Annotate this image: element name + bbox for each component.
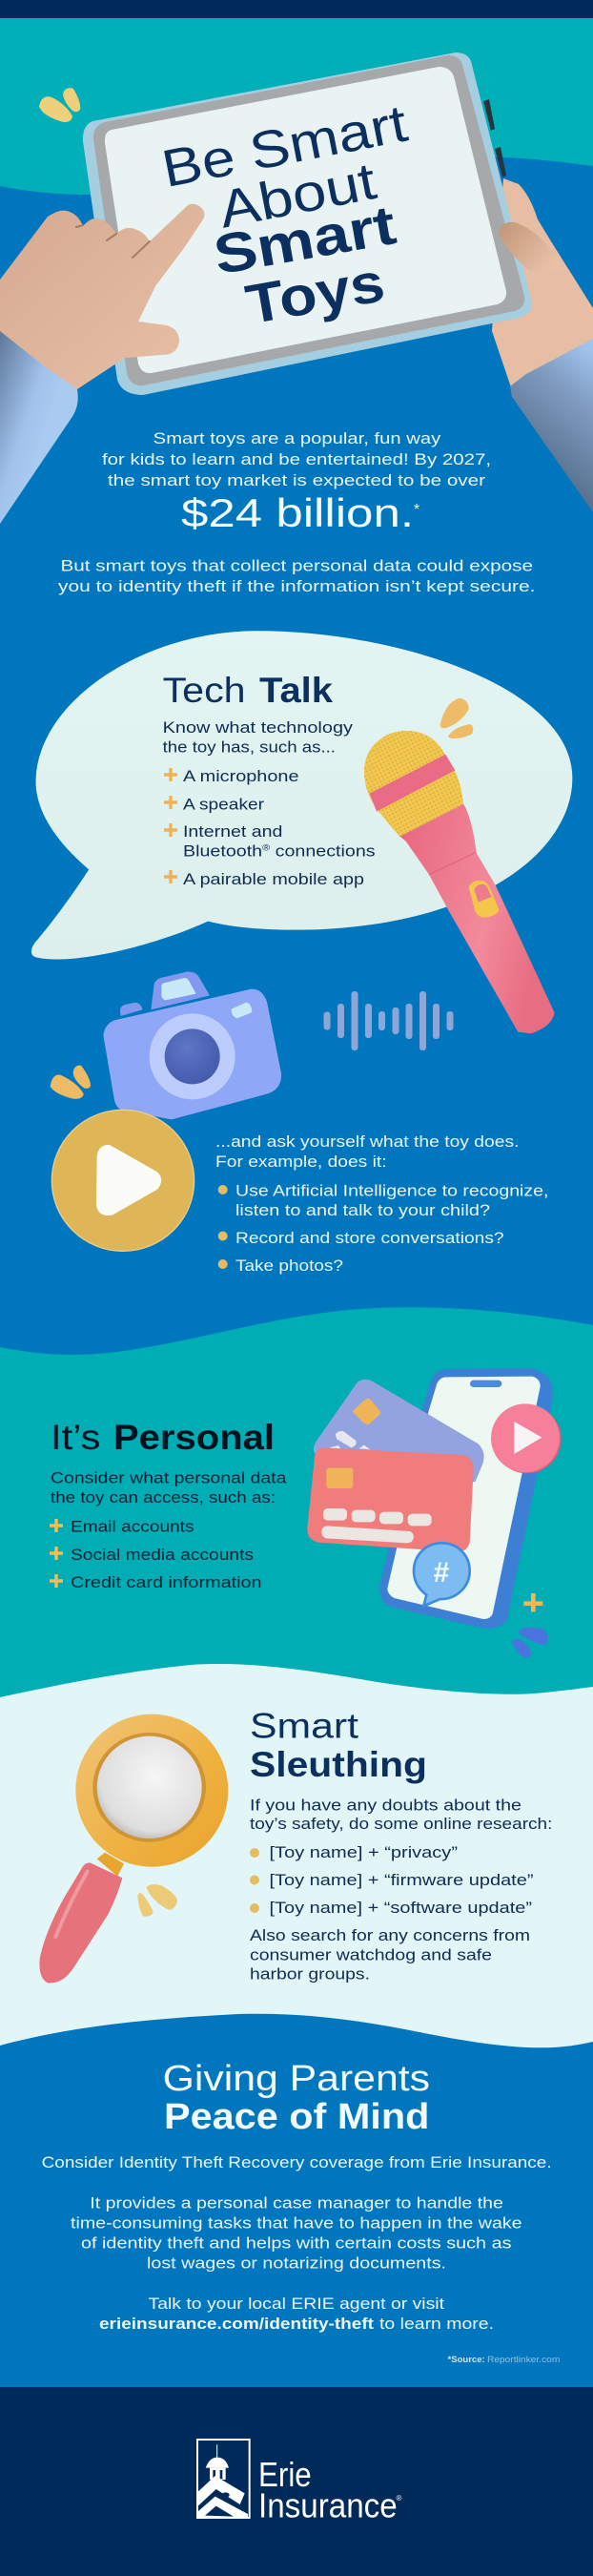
heading: it's personal: It’s bbox=[51, 1418, 101, 1457]
heading: giving parents peace of mind: Peace of Mind bbox=[164, 2097, 429, 2137]
yellow spark marks bbox=[39, 88, 80, 122]
logo mark: building bbox=[197, 2440, 250, 2518]
text block: identity theft coverage bbox=[42, 2154, 552, 2333]
text block: personal data list: Credit card information bbox=[71, 1574, 262, 1591]
text block: what the toy does: For example, does it: bbox=[215, 1153, 387, 1171]
plus-list of technology: A speaker bbox=[183, 797, 265, 814]
text block: identity theft coverage: of identity theft and helps with certain costs such as bbox=[81, 2234, 511, 2252]
intro text: Smart toys are a popular, fun way bbox=[153, 430, 441, 447]
text block: online research bbox=[250, 1797, 552, 1984]
text block: what the toy does: Take photos? bbox=[235, 1257, 343, 1275]
text block: what the toy does: Record and store conversations? bbox=[235, 1230, 504, 1247]
text block: identity theft coverage: It provides a personal case manager to handle the bbox=[90, 2194, 503, 2212]
hashtag bubble: # bbox=[434, 1557, 450, 1589]
logo wordmark: Erie bbox=[258, 2455, 312, 2494]
icon: gold play button bbox=[51, 1066, 194, 1251]
text block: what the toy does: listen to and talk to your child? bbox=[235, 1202, 490, 1219]
left sleeve bbox=[0, 331, 78, 524]
text block: online research: Also search for any concerns from bbox=[250, 1927, 530, 1944]
text block: personal data list: Consider what personal data bbox=[51, 1469, 286, 1486]
plus-list of technology: A microphone bbox=[183, 768, 299, 785]
background: sleuthing mint section bbox=[0, 1664, 593, 2061]
text block: identity theft coverage: time-consuming tasks that have to happen in the wake bbox=[71, 2215, 522, 2233]
illustration: hands holding tablet bbox=[0, 52, 593, 524]
red credit card bbox=[307, 1447, 474, 1552]
hashtag bubble bbox=[414, 1543, 470, 1606]
text block: online research: [Toy name] + “firmware update” bbox=[269, 1872, 534, 1889]
phone bbox=[379, 1368, 553, 1629]
heading: smart sleuthing bbox=[250, 1707, 427, 1784]
heading: smart sleuthing: Sleuthing bbox=[250, 1745, 427, 1784]
background: footer navy band bbox=[0, 2387, 593, 2576]
intro warning text: But smart toys that collect personal data could expose bbox=[61, 557, 533, 574]
text block: online research: [Toy name] + “privacy” bbox=[269, 1844, 458, 1861]
intro copy: the toy has, such as... bbox=[163, 739, 336, 757]
source note: Reportlinker.com bbox=[487, 2355, 560, 2364]
icon: magnifying glass bbox=[39, 1714, 228, 1983]
plus-list of technology: A pairable mobile app bbox=[183, 871, 364, 888]
logo wordmark: ® bbox=[397, 2494, 402, 2503]
title on tablet screen bbox=[157, 93, 412, 336]
statistic: $24 billion: $24 billion. bbox=[181, 490, 414, 535]
heading: tech talk bbox=[163, 671, 333, 710]
title on tablet screen: Be Smart bbox=[157, 93, 412, 198]
intro text: the smart toy market is expected to be over bbox=[108, 472, 486, 489]
heading: tech talk: Tech bbox=[163, 671, 246, 710]
text block: personal data list bbox=[50, 1469, 286, 1591]
text block: online research: consumer watchdog and safe bbox=[250, 1946, 492, 1963]
plus-list of technology: connections bbox=[270, 843, 376, 861]
intro text bbox=[102, 430, 491, 489]
bubble shape bbox=[31, 631, 572, 959]
heading: tech talk: Talk bbox=[259, 671, 333, 710]
intro text: for kids to learn and be entertained! By 2027, bbox=[102, 451, 491, 468]
background: top navy strip bbox=[0, 0, 593, 18]
text block: identity theft coverage: Consider Identity Theft Recovery coverage from Erie Insurance. bbox=[42, 2154, 552, 2171]
text block: identity theft coverage: Talk to your local ERIE agent or visit bbox=[149, 2296, 445, 2313]
plus-list of technology bbox=[164, 768, 376, 888]
intro copy: Know what technology bbox=[163, 719, 354, 737]
text block: what the toy does: ...and ask yourself what the toy does. bbox=[215, 1133, 519, 1151]
plus-list of technology: ® bbox=[262, 843, 271, 853]
left pointing hand bbox=[0, 204, 204, 389]
heading: giving parents peace of mind bbox=[163, 2059, 430, 2137]
background: peace of mind blue section bbox=[0, 2014, 593, 2395]
plus-list of technology: Bluetooth bbox=[183, 843, 248, 861]
purple credit card bbox=[314, 1380, 484, 1482]
icon: pink and yellow microphone bbox=[364, 698, 555, 1033]
logo: Erie Insurance bbox=[197, 2440, 402, 2524]
text block: identity theft coverage: lost wages or notarizing documents. bbox=[147, 2255, 446, 2273]
heading: it's personal: Personal bbox=[113, 1418, 275, 1457]
text block: online research: harbor groups. bbox=[250, 1966, 370, 1984]
source note: *Source: bbox=[448, 2355, 485, 2364]
thumb of right hand bbox=[499, 222, 562, 271]
yellow plus and blue sparks bbox=[512, 1593, 548, 1657]
logo wordmark: Insurance bbox=[258, 2485, 398, 2524]
text block: online research: toy’s safety, do some online research: bbox=[250, 1816, 552, 1833]
title on tablet screen: Toys bbox=[241, 251, 389, 336]
text block: online research: If you have any doubts about the bbox=[250, 1797, 521, 1815]
source note bbox=[448, 2355, 560, 2364]
heading: it's personal bbox=[51, 1418, 275, 1457]
heading: giving parents peace of mind: Giving Parents bbox=[163, 2059, 430, 2099]
text block: identity theft coverage: erieinsurance.com/identity-theft bbox=[99, 2316, 375, 2333]
intro warning text bbox=[58, 557, 536, 595]
text block: personal data list: Email accounts bbox=[71, 1518, 194, 1535]
text block: personal data list: the toy can access, such as: bbox=[51, 1489, 276, 1506]
text block: what the toy does: Use Artificial Intelligence to recognize, bbox=[235, 1183, 548, 1200]
heading: smart sleuthing: Smart bbox=[250, 1707, 359, 1746]
title on tablet screen: About bbox=[214, 151, 380, 239]
icon: sound waveform bbox=[324, 991, 454, 1050]
text block: personal data list: Social media accounts bbox=[71, 1547, 254, 1564]
background: top teal wave bbox=[0, 18, 593, 195]
title on tablet screen: Smart bbox=[209, 194, 400, 286]
intro copy bbox=[163, 719, 354, 757]
plus-list of technology: Internet and bbox=[183, 823, 282, 841]
right hand behind tablet bbox=[492, 178, 593, 387]
background: personal teal section bbox=[0, 1307, 593, 1708]
logo wordmark bbox=[258, 2455, 402, 2524]
text block: what the toy does bbox=[215, 1133, 548, 1275]
right sleeve bbox=[510, 339, 593, 512]
statistic: $24 billion: * bbox=[414, 502, 419, 518]
pink play badge bbox=[491, 1403, 562, 1473]
text block: identity theft coverage: to learn more. bbox=[379, 2316, 494, 2333]
icon: phone with credit cards bbox=[307, 1368, 562, 1657]
tablet body bbox=[83, 52, 532, 395]
icon: camera bbox=[103, 971, 281, 1119]
text block: online research: [Toy name] + “software update” bbox=[269, 1900, 532, 1917]
panel: tech talk speech bubble bbox=[31, 631, 572, 959]
intro warning text: you to identity theft if the information isn’t kept secure. bbox=[58, 578, 536, 595]
